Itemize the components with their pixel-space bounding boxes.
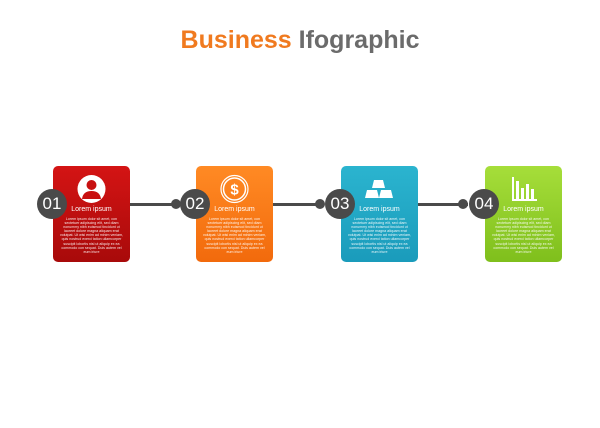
icon: user xyxy=(78,175,106,203)
badge 04: 04 xyxy=(475,194,493,213)
panel: step 1 xyxy=(53,166,130,262)
badge 03 xyxy=(325,189,355,219)
dot 2 xyxy=(171,199,181,209)
text: Lorem ipsum dolor sit amet, con sectetuer adipiscing elit, sed diam nonummy nibh euismod tincidunt ut laoreet dolore magna aliquam erat volutpat. Ut wisi enim ad minim veniam, quis nostrud exerci tation ullamcorper suscipit lobortis nisl ut aliquip ex ea commodo con sequat. Duis autem vel eum iriure xyxy=(492,217,555,254)
text: Lorem ipsum dolor sit amet, con sectetuer adipiscing elit, sed diam nonummy nibh euismod tincidunt ut laoreet dolore magna aliquam erat volutpat. Ut wisi enim ad minim veniam, quis nostrud exerci tation ullamcorper suscipit lobortis nisl ut aliquip ex ea commodo con sequat. Duis autem vel eum iriure xyxy=(203,217,266,254)
title: Business Ifographic xyxy=(181,26,419,54)
badge 01: 01 xyxy=(43,194,61,213)
dot 3 xyxy=(315,199,325,209)
icon: dollar xyxy=(220,174,249,204)
connector 1-2 xyxy=(130,203,180,206)
icon: gold bars xyxy=(365,180,393,198)
heading: Lorem ipsum xyxy=(71,206,112,213)
panel: step 4 xyxy=(485,166,562,262)
text: Lorem ipsum dolor sit amet, con sectetuer adipiscing elit, sed diam nonummy nibh euismod tincidunt ut laoreet dolore magna aliquam erat volutpat. Ut wisi enim ad minim veniam, quis nostrud exerci tation ullamcorper suscipit lobortis nisl ut aliquip ex ea commodo con sequat. Duis autem vel eum iriure xyxy=(60,217,123,254)
heading: Lorem ipsum xyxy=(214,206,255,213)
text: Lorem ipsum dolor sit amet, con sectetuer adipiscing elit, sed diam nonummy nibh euismod tincidunt ut laoreet dolore magna aliquam erat volutpat. Ut wisi enim ad minim veniam, quis nostrud exerci tation ullamcorper suscipit lobortis nisl ut aliquip ex ea commodo con sequat. Duis autem vel eum iriure xyxy=(348,217,411,254)
heading: Lorem ipsum xyxy=(359,206,400,213)
heading: Lorem ipsum xyxy=(503,206,544,213)
icon: dollar: $ xyxy=(230,182,239,198)
dot 4 xyxy=(458,199,468,209)
badge 01 xyxy=(37,189,67,219)
badge 02 xyxy=(180,189,210,219)
connector 3-4 xyxy=(418,203,468,206)
badge 04 xyxy=(469,189,499,219)
icon: bar chart xyxy=(512,177,537,201)
badge 02: 02 xyxy=(186,194,204,213)
panel: step 3 xyxy=(341,166,418,262)
panel: step 2 xyxy=(196,166,273,262)
connector 2-3 xyxy=(273,203,323,206)
badge 03: 03 xyxy=(331,194,349,213)
